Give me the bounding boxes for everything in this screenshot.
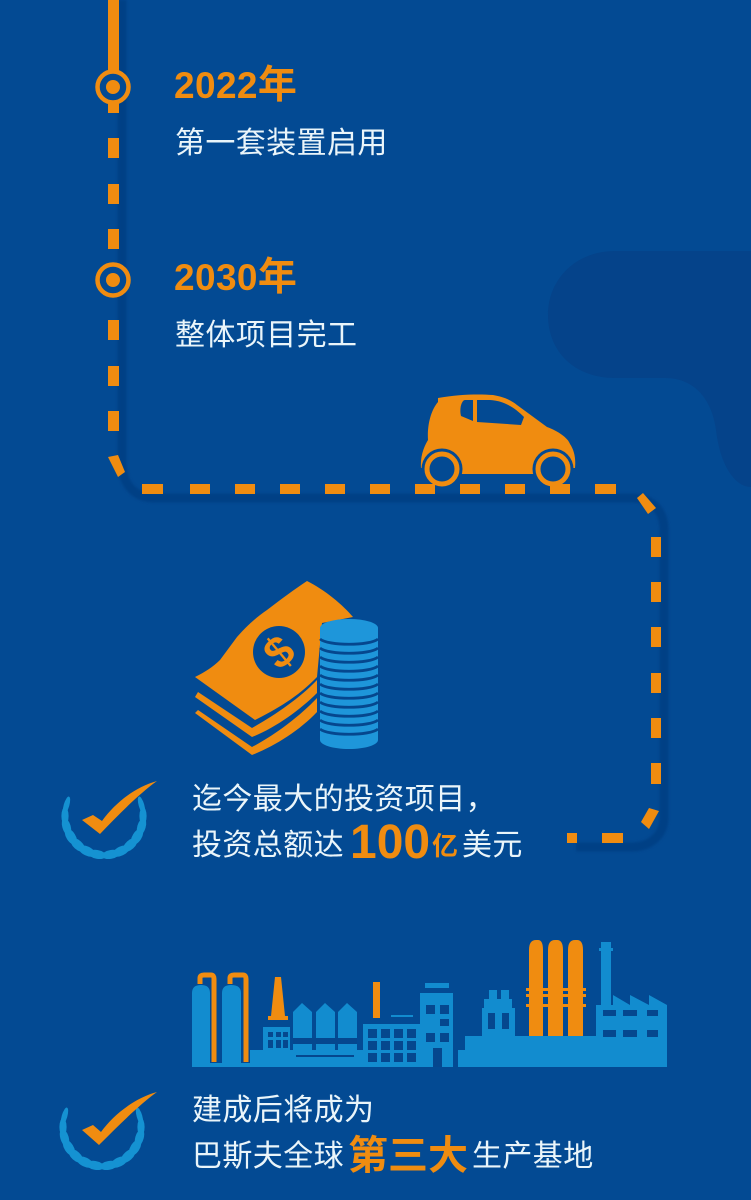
text: BASF global: 巴斯夫全球 (192, 1140, 344, 1173)
timeline marker 2030 (98, 264, 128, 296)
route line (108, 0, 661, 843)
icon: money and coins (195, 581, 378, 755)
highlight: third largest: 第三大 (348, 1134, 468, 1178)
icon: check with laurel 1 (60, 781, 157, 860)
heading: 2030: 2030年 (174, 256, 297, 299)
icon: car (421, 394, 575, 490)
figure unit: 亿: 亿 (432, 831, 458, 861)
text: US dollars: 美元 (462, 829, 523, 862)
background blob (548, 251, 751, 487)
icon: money and coins: $ (254, 626, 304, 679)
text: investment total: 投资总额达 (192, 829, 344, 862)
text: upon completion: 建成后将成为 (192, 1094, 374, 1127)
timeline marker 2022 (98, 72, 128, 102)
text: production base: 生产基地 (472, 1140, 594, 1173)
text: project completion: 整体项目完工 (175, 319, 357, 352)
heading: 2022: 2022年 (174, 64, 297, 107)
text: first unit: 第一套装置启用 (175, 127, 388, 160)
route shadow (122, 0, 664, 847)
text: largest investment: 迄今最大的投资项目， (192, 783, 496, 816)
figure: 100: 100 (350, 816, 430, 869)
icon: check with laurel 2 (58, 1092, 157, 1171)
icon: factory skyline (192, 940, 667, 1067)
